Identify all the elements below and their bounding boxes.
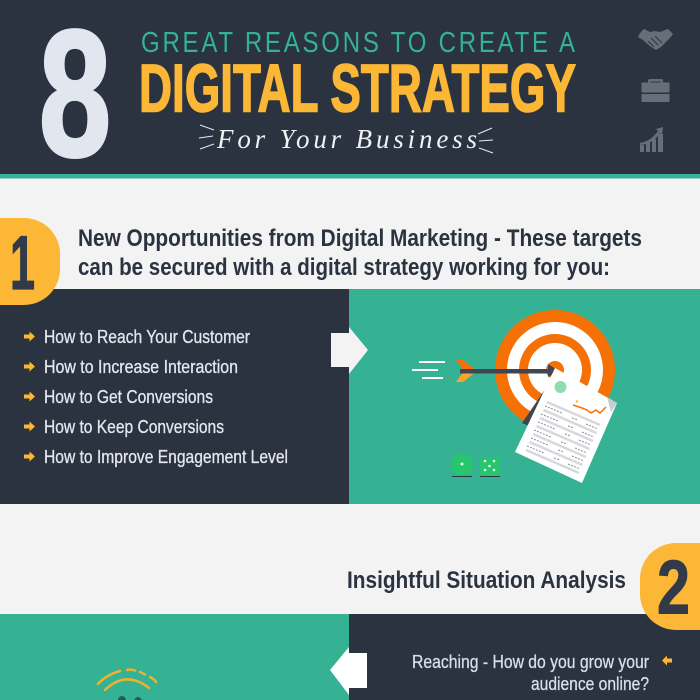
icon: signal waves — [98, 670, 156, 690]
section 1 heading — [78, 225, 642, 281]
list items: How to Reach Your Customer — [44, 327, 250, 347]
icon: figure tops — [118, 696, 142, 700]
arrow: section 1 — [331, 327, 368, 374]
badge: number 2: 2 — [657, 546, 690, 630]
icon: arrow — [456, 360, 559, 426]
badge: number 1: 1 — [10, 221, 35, 306]
list text: audience online? — [531, 674, 649, 694]
list items: How to Increase Interaction — [44, 357, 238, 377]
list items: How to Keep Conversions — [44, 417, 224, 437]
section 1 heading: can be secured with a digital strategy working for you: — [78, 254, 610, 281]
list items — [44, 327, 288, 467]
arrow: section 2 — [330, 647, 367, 695]
title line: great reasons: GREAT REASONS TO CREATE A — [141, 26, 575, 59]
list items: How to Improve Engagement Level — [44, 447, 288, 467]
speed lines — [412, 362, 445, 378]
subtitle rays left — [199, 125, 214, 149]
icon: handshake — [638, 29, 673, 50]
list bullet arrows — [24, 332, 35, 462]
list items: How to Get Conversions — [44, 387, 213, 407]
badge: number 1 — [0, 218, 60, 306]
subtitle rays right — [478, 128, 493, 153]
panel: section 2 list — [349, 614, 700, 700]
header banner — [0, 0, 700, 194]
list text — [412, 652, 649, 694]
subtitle: for your business: For Your Business — [216, 124, 477, 154]
icon: data sheet — [515, 368, 617, 483]
panel: section 1 illustration — [349, 289, 700, 504]
list text: Reaching - How do you grow your — [412, 652, 649, 672]
icon: growth chart — [640, 127, 663, 152]
list bullet arrow — [662, 656, 672, 666]
panel: section 1 list — [0, 289, 349, 504]
section 2 heading: Insightful Situation Analysis — [347, 567, 626, 594]
icon: target — [495, 310, 615, 430]
badge: number 2 — [640, 543, 700, 630]
icon: briefcase — [642, 79, 670, 102]
panel: section 2 illustration — [0, 614, 349, 700]
icon: green dice — [451, 454, 500, 476]
